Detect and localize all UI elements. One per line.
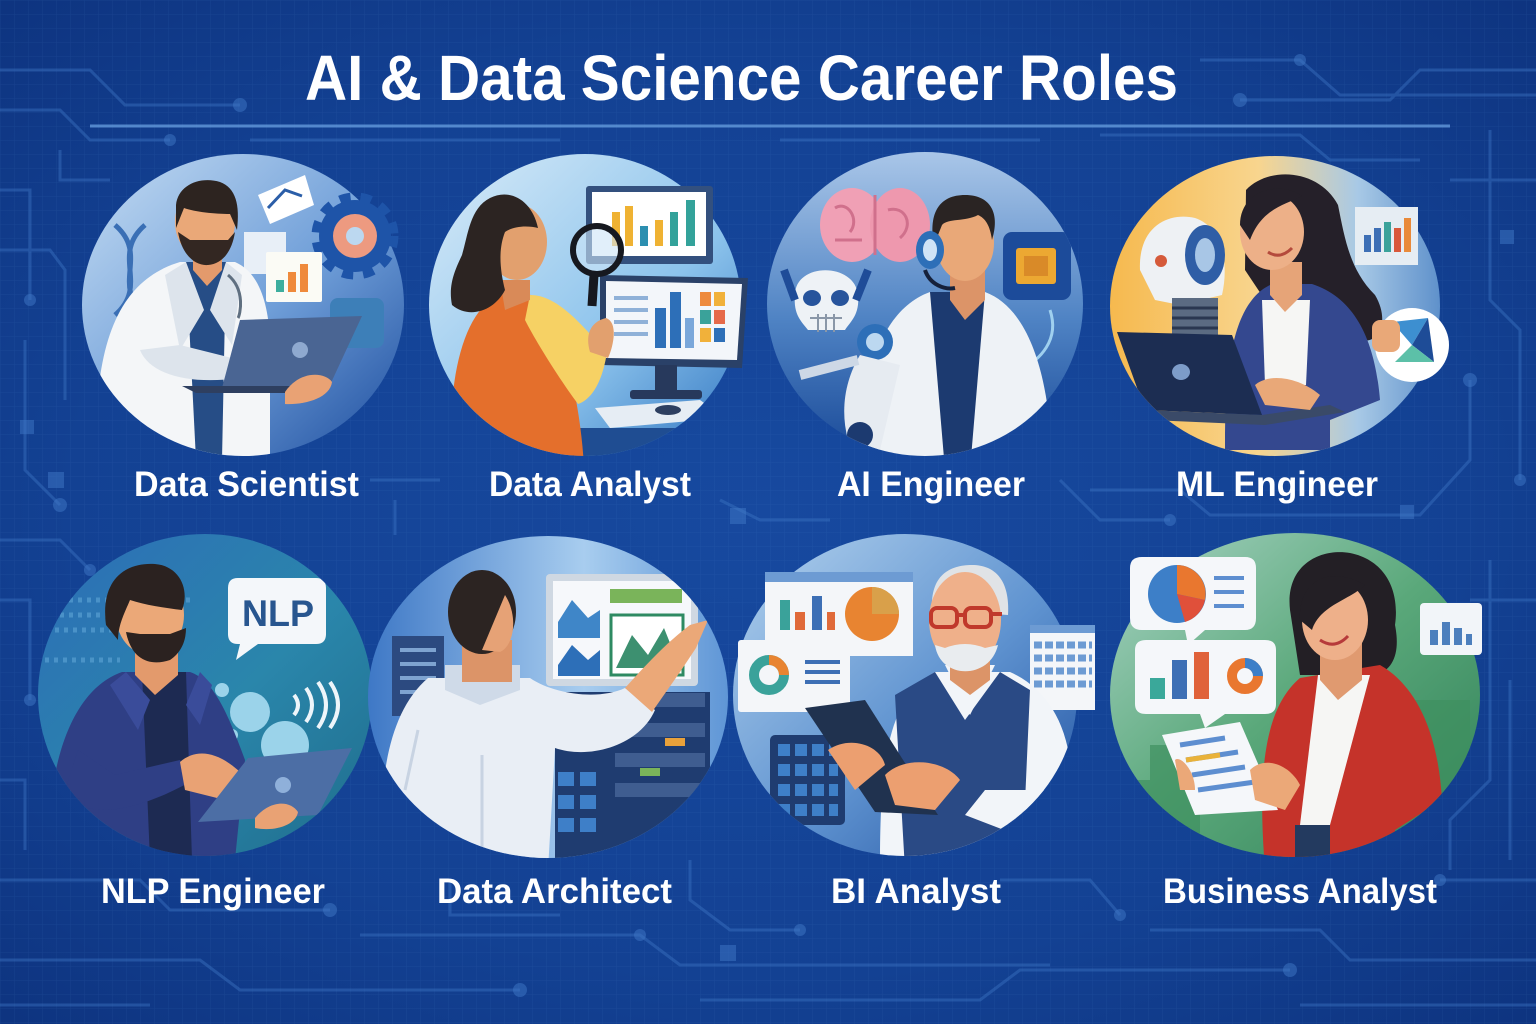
role: Data Architect (368, 536, 728, 870)
report document (1162, 722, 1278, 815)
ml engineer woman (1117, 174, 1400, 450)
server racks right (555, 692, 710, 858)
role: AI Engineer (767, 152, 1083, 470)
calendar card (1030, 625, 1095, 710)
calculator panel (770, 735, 845, 825)
red glasses (931, 608, 1002, 627)
icon: chip (1003, 232, 1071, 300)
sound waves (294, 682, 338, 728)
headset (916, 231, 955, 288)
dashboard window (765, 572, 913, 656)
role: ML Engineer (1110, 156, 1449, 456)
role: Business Analyst (1110, 533, 1482, 870)
chart card (1355, 207, 1418, 265)
title: AI & Data Science Career Roles (305, 42, 1178, 114)
stethoscope (228, 275, 241, 318)
laptop (1117, 332, 1262, 415)
speech bubble: NLP: NLP (242, 593, 314, 634)
monitor stand and keyboard (576, 365, 704, 456)
pie bubble (1375, 308, 1449, 382)
nlp engineer man (49, 564, 352, 860)
label: BI Analyst: BI Analyst (831, 872, 1001, 911)
robotic arm (800, 324, 900, 450)
clipboard (805, 700, 938, 815)
architect man (381, 570, 708, 870)
analyst (450, 195, 621, 470)
bar and donut bubble (1135, 640, 1276, 728)
tablet (198, 748, 352, 822)
bottom monitor (600, 275, 748, 368)
icon: robot (1140, 217, 1225, 336)
engineer (800, 195, 1055, 470)
role: BI Analyst (733, 534, 1095, 870)
label: ML Engineer: ML Engineer (1176, 465, 1378, 504)
senior analyst (805, 565, 1072, 870)
icon: DNA helix (115, 225, 145, 315)
icon: magnifier (573, 226, 621, 306)
data dot field (45, 600, 190, 660)
laptop (222, 316, 362, 388)
pie bubble (1130, 557, 1256, 645)
label: Data Analyst: Data Analyst (489, 465, 691, 504)
server rack left (392, 636, 444, 716)
pixel field (1120, 700, 1470, 860)
top monitor (586, 186, 713, 264)
label: AI Engineer: AI Engineer (837, 465, 1025, 504)
role: Data Scientist (82, 154, 404, 460)
wall screen (546, 574, 698, 686)
role: Data Analyst (429, 154, 748, 470)
icon: network card (258, 175, 314, 224)
donut card (738, 640, 850, 712)
small chart bubble (1420, 603, 1482, 655)
icon: chip (330, 298, 384, 348)
label: Data Scientist: Data Scientist (134, 465, 359, 504)
icon: brain (820, 188, 930, 262)
chart card (244, 232, 322, 302)
language nodes (215, 683, 309, 756)
scientist (96, 180, 362, 460)
label: NLP Engineer: NLP Engineer (101, 872, 325, 911)
business analyst woman (1162, 552, 1442, 870)
label: Data Architect: Data Architect (437, 872, 672, 911)
speech bubble: NLP (228, 578, 326, 660)
role: NLP Engineer (38, 534, 372, 860)
icon: robot skull (784, 270, 868, 332)
title underline (90, 124, 1450, 128)
icon: gear (316, 197, 394, 275)
label: Business Analyst: Business Analyst (1163, 872, 1437, 911)
